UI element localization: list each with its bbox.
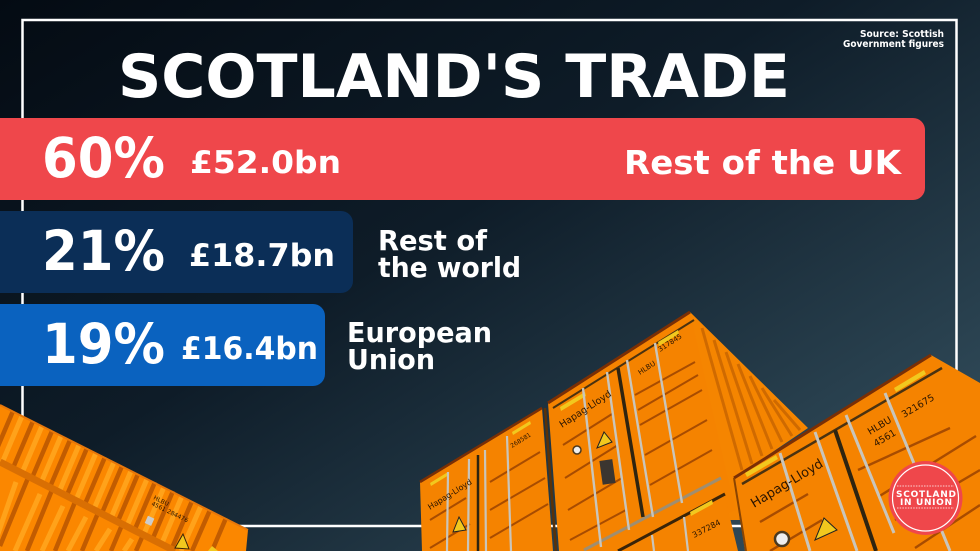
logo: Scotland in Union: SCOTLAND: [896, 490, 956, 500]
label: European Union: [347, 316, 492, 376]
container: lower centre: [618, 494, 738, 551]
bar: Rest of the world: [0, 211, 353, 293]
container: right: [734, 355, 980, 551]
logo: Scotland in Union: [888, 461, 962, 535]
label: Rest of the world: the world: [378, 251, 521, 284]
bar: European Union: 19%: [42, 312, 165, 376]
source note: Source: Scottish: [860, 29, 944, 40]
container: right: HLBU: [866, 415, 894, 438]
container: lower left: 4561 284476: [150, 501, 189, 524]
container: top centre: [548, 312, 808, 551]
label: Rest of the world: [378, 224, 521, 284]
logo: Scotland in Union: IN UNION: [900, 498, 952, 508]
container: top centre: HLBU: [637, 360, 657, 377]
container: left stack: [420, 408, 556, 551]
source note: [843, 29, 944, 50]
container: lower left: [0, 405, 248, 551]
bar: Rest of the UK: Rest of the UK: [624, 143, 902, 182]
bar: Rest of the UK: £52.0bn: [190, 145, 341, 181]
container: right: 4561: [872, 428, 898, 450]
container markings: 337284: [691, 518, 722, 540]
label: Rest of the world: Rest of: [378, 224, 488, 257]
label: European Union: European: [347, 316, 492, 349]
bar: European Union: £16.4bn: [181, 331, 318, 367]
container: top centre: 317845: [657, 332, 684, 354]
container markings: Hapag-Lloyd: [558, 389, 614, 431]
container: left stack: 268581: [509, 432, 533, 450]
container: right: 321675: [900, 392, 937, 421]
bar: Rest of the UK: [0, 118, 925, 200]
container markings: Hapag-Lloyd: [748, 457, 826, 511]
bar: Rest of the UK: 60%: [42, 126, 165, 190]
bar: Rest of the world: £18.7bn: [189, 238, 335, 274]
source note: Government figures: [843, 39, 944, 50]
bar: Rest of the world: 21%: [42, 219, 165, 283]
bar: European Union: [0, 304, 325, 386]
title: SCOTLAND'S TRADE: [118, 42, 790, 112]
container markings: HLBU: [152, 495, 170, 508]
container markings: Hapag-Lloyd: [426, 477, 474, 512]
label: European Union: Union: [347, 343, 435, 376]
